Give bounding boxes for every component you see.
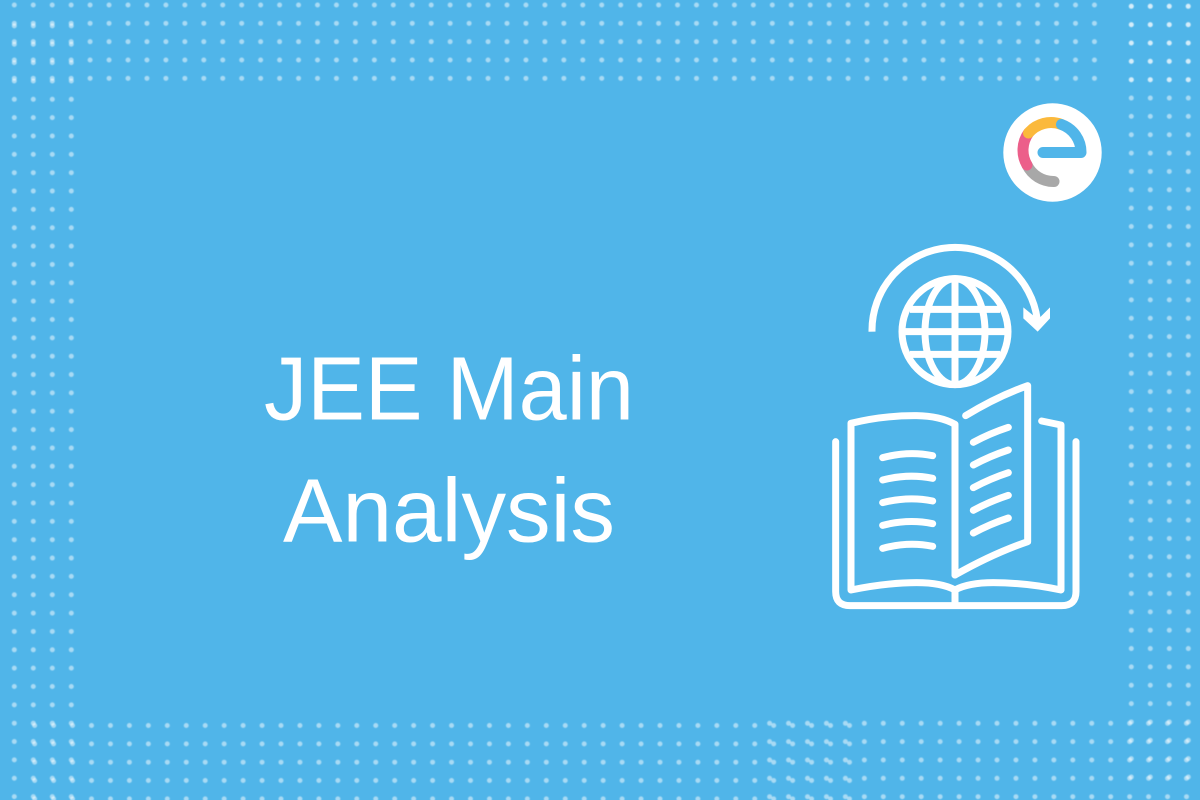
icon: book [836, 386, 1076, 606]
icon: globe [902, 279, 1008, 385]
logo badge [1003, 103, 1102, 202]
icon: curved arrow [872, 247, 1050, 332]
title line: JEE Main: JEE Main [264, 340, 634, 440]
title line: Analysis: Analysis [283, 462, 615, 562]
icon: open book with rotating globe [836, 247, 1076, 606]
title [264, 340, 634, 562]
